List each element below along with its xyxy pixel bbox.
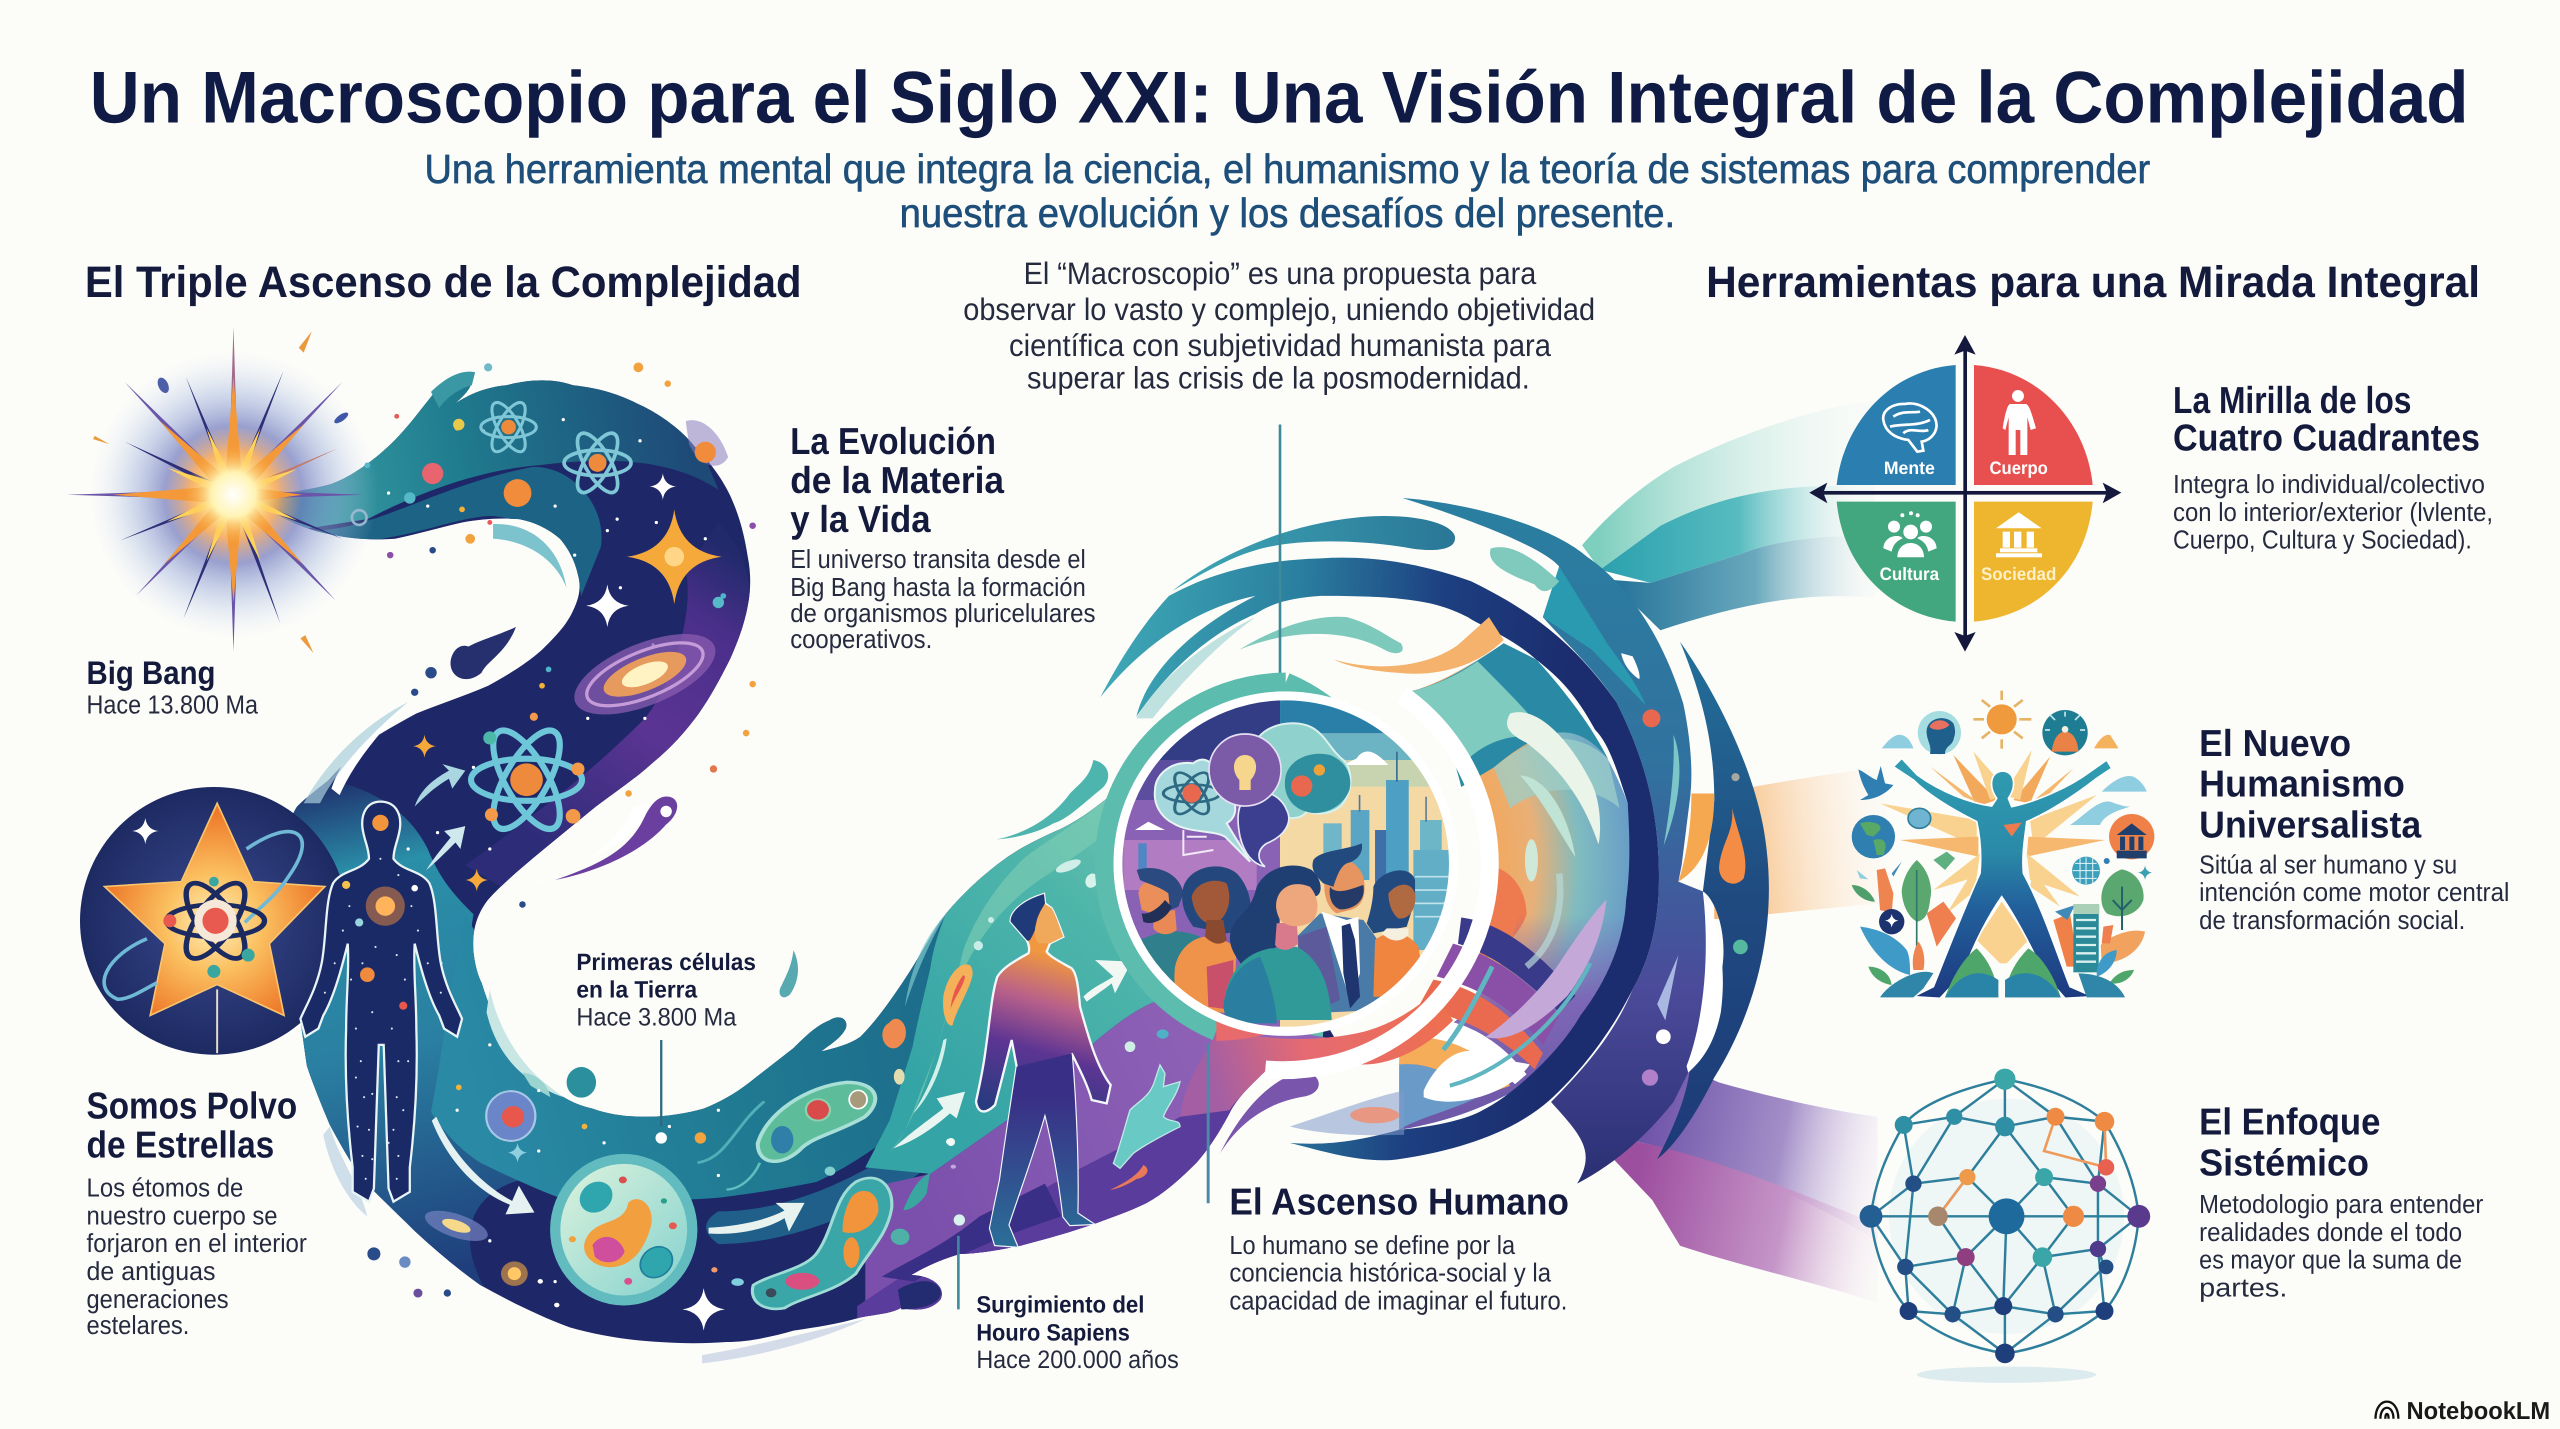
small cards [1857, 852, 2152, 880]
text: Big Bang [87, 656, 258, 720]
subtitle: Una herramienta mental que integra la ciencia, el humanismo y la teoría de sistemas para comprender [424, 147, 2150, 193]
red band under the circle [1205, 993, 1453, 1078]
left foliage [1852, 860, 1956, 997]
macroscope intro text: superar las crisis de la posmodernidad. [1027, 362, 1530, 397]
orange wedge [1678, 793, 1714, 882]
text: human ascent [1229, 1180, 1569, 1316]
red cell [943, 964, 973, 1026]
icon: star in a circle [80, 787, 348, 1055]
head in circle [1918, 711, 1961, 754]
emblem circle [2042, 710, 2088, 755]
text: systemic approach: Sistémico [2199, 1141, 2369, 1184]
text: new humanism: El Nuevo [2199, 722, 2351, 764]
ribbon wisps [304, 372, 865, 1363]
atom bubble [1155, 760, 1250, 862]
figure [1893, 758, 2112, 998]
text: systemic approach: realidades donde el todo [2199, 1220, 2462, 1247]
temple badge [2109, 814, 2154, 859]
icon: bubble planet [486, 1091, 535, 1141]
white crescent [1687, 891, 1723, 1073]
label: Cuerpo: Cuerpo [1990, 458, 2048, 478]
beam: purple to systemic [1562, 1045, 1878, 1303]
text: four quadrants [2173, 379, 2493, 555]
sun [1973, 691, 2031, 749]
subtitle: nuestra evolución y los desafíos del presente. [900, 191, 1675, 237]
mid ribbon objects and Homo sapiens [882, 760, 1319, 1247]
text: we are stardust: generaciones [87, 1287, 229, 1314]
quadrant diagram [1809, 335, 2121, 652]
macroscope circle scene [1113, 693, 1460, 1027]
bottom mounds [1945, 948, 2061, 997]
arrows on the upper ribbon [415, 764, 465, 870]
text: we are stardust: Los étomos de [87, 1176, 243, 1203]
text: evolution of matter and life: cooperativos. [790, 627, 932, 655]
axes with arrows [1809, 335, 2121, 652]
text: evolution of matter and life: El universo transita desde el [790, 547, 1086, 575]
swoosh above ribbon [997, 760, 1108, 839]
person: man in suit [1297, 843, 1380, 1013]
text: four quadrants: con lo interior/exterior (lvlente, [2173, 500, 2493, 527]
bird [1858, 766, 1893, 800]
icon: embryo organism [752, 1178, 892, 1309]
text: evolution of matter and life: de organismos pluricelulares [790, 601, 1096, 629]
small comet [1110, 1165, 1148, 1190]
text: evolution of matter and life: Big Bang hasta la formación [790, 575, 1086, 602]
teal streaks [905, 857, 1100, 1113]
callout line: Homo sapiens [957, 1236, 959, 1309]
icon: universal humanism figure [1852, 691, 2154, 998]
text: we are stardust: nuestro cuerpo se [87, 1203, 278, 1231]
bubble dots [1291, 764, 1325, 797]
heading: triple ascent: El Triple Ascenso de la Complejidad [85, 258, 802, 307]
text: four quadrants: Integra lo individual/colectivo [2173, 472, 2485, 500]
text: evolution of matter and life: de la Materia [790, 459, 1004, 501]
swoosh: teal upper stroke [1172, 516, 1455, 591]
text: Homo sapiens: Houro Sapiens [976, 1321, 1130, 1347]
arc: main navy [1100, 558, 1659, 1160]
text: first cells [576, 950, 756, 1032]
text: human ascent: capacidad de imaginar el futuro. [1229, 1288, 1567, 1316]
back bubble [1257, 723, 1351, 818]
small planet [1908, 808, 1931, 828]
white tear [1621, 653, 1640, 679]
title: Un Macroscopio para el Siglo XXI: Una Visión Integral de la Complejidad [90, 56, 2469, 139]
text: Homo sapiens [976, 1293, 1179, 1375]
arc: steel body [1402, 498, 1714, 1184]
pale teal blob [1490, 547, 1559, 591]
text: four quadrants: Cuatro Cuadrantes [2173, 416, 2480, 459]
purple blob below ribbon [1220, 1072, 1319, 1153]
person: bearded man left [1136, 868, 1200, 984]
quadrant: Mente [1837, 365, 1956, 485]
icon: brain [1883, 403, 1936, 452]
ring of the macroscope [1105, 682, 1490, 1070]
text: we are stardust: estelares. [87, 1313, 189, 1340]
icon: golden star and sparkles [413, 473, 725, 1331]
small dots on purple [891, 1029, 1169, 1245]
teal bubble [1285, 754, 1350, 813]
scene background [1113, 693, 1460, 1027]
callout line: human ascent [1207, 1043, 1209, 1203]
person: central woman [1223, 865, 1332, 1023]
pale band under left arc [1136, 617, 1256, 718]
beam: orange to humanism [1714, 767, 1886, 919]
text: systemic approach: partes. [2199, 1275, 2287, 1303]
text: first cells: Primeras células [576, 950, 756, 976]
text: systemic approach: El Enfoque [2199, 1100, 2380, 1143]
icon: institution building [1996, 512, 2042, 557]
label: Cultura: Cultura [1880, 564, 1939, 584]
teal streak [1664, 735, 1679, 846]
text: evolution of matter and life [790, 420, 1096, 655]
text: systemic approach [2199, 1100, 2484, 1303]
swirl panel right of the macroscope [1399, 643, 1636, 1130]
callout line: first cells [660, 1040, 662, 1127]
text: we are stardust: forjaron en el interior [87, 1231, 308, 1259]
icon: small galaxy [420, 1204, 492, 1247]
teal creature [1113, 1065, 1180, 1168]
arrow into cell [432, 1117, 534, 1214]
icon: large cell [550, 1154, 697, 1305]
text: human ascent: Lo humano se define por la [1229, 1233, 1515, 1260]
person: woman left [1174, 866, 1251, 1013]
macroscope intro text: científica con subjetividad humanista para [1009, 330, 1552, 364]
scene ring outline [1118, 696, 1453, 1031]
cosmic dots on the ribbon [367, 367, 753, 1293]
arrow right of man [1083, 960, 1132, 1002]
city skyline [1323, 752, 1455, 950]
pale disc [894, 1070, 904, 1085]
globe [2072, 857, 2100, 885]
text: evolution of matter and life: y la Vida [790, 498, 931, 540]
tail blob of the ribbon [898, 1281, 941, 1309]
icon: large atom [471, 713, 584, 838]
stripe on steel body [1543, 567, 1646, 705]
text: new humanism: Sitúa al ser humano y su [2199, 852, 2457, 880]
right foliage [2053, 869, 2145, 997]
man figure [976, 894, 1111, 1247]
text: we are stardust [87, 1084, 308, 1340]
earth [1852, 815, 1895, 858]
arrow left of man [893, 1092, 965, 1148]
text: Homo sapiens: Hace 200.000 años [976, 1347, 1179, 1375]
icon: bacterium [697, 1082, 875, 1189]
lower ribbon objects (cell stages) [420, 1019, 953, 1309]
icon: Big Bang explosion [67, 327, 377, 653]
icon: small planets in the upper ribbon [352, 419, 724, 608]
quadrant: Cuerpo [1974, 365, 2093, 485]
macroscope intro text: observar lo vasto y complejo, uniendo objetividad [963, 294, 1595, 328]
pale teal stroke [1239, 617, 1403, 653]
people group [1137, 843, 1420, 1023]
text: Big Bang: Hace 13.800 Ma [87, 692, 258, 720]
NotebookLM logo: NotebookLM [2407, 1398, 2550, 1425]
arrow out of cell [709, 1203, 805, 1234]
icon: person [2003, 390, 2036, 455]
small red disc [882, 1022, 904, 1048]
icon: people [1883, 511, 1937, 557]
text: systemic approach: es mayor que la suma de [2199, 1247, 2462, 1275]
icon: glowing orb [501, 1261, 528, 1286]
subtitle [424, 147, 2150, 237]
arc: outer dark [1657, 642, 1769, 1159]
quadrant: Cultura [1837, 502, 1956, 622]
macroscope intro text [963, 258, 1595, 397]
dark swirl bubble [1238, 792, 1289, 867]
text: systemic approach: Metodologio para entender [2199, 1192, 2484, 1220]
text: new humanism: Universalista [2199, 803, 2422, 846]
text: we are stardust: de Estrellas [87, 1123, 274, 1166]
text: we are stardust: de antiguas [87, 1259, 216, 1287]
clouds [1882, 735, 2147, 825]
text: four quadrants: Cuerpo, Cultura y Sociedad). [2173, 527, 2472, 555]
decorative dots near organisms [538, 1019, 953, 1307]
person: woman right [1367, 870, 1420, 997]
quadrant: Sociedad [1974, 502, 2093, 622]
text: first cells: en la Tierra [576, 978, 699, 1004]
text: Big Bang: Big Bang [87, 656, 216, 692]
bulb bubble [1209, 734, 1281, 806]
text: four quadrants: La Mirilla de los [2173, 379, 2411, 421]
beam: teal to quadrants [1582, 402, 1874, 630]
text: human ascent: conciencia histórica-social y la [1229, 1260, 1551, 1288]
icon: human figure of stardust [300, 802, 462, 1202]
left temple [1135, 822, 1213, 873]
callout line: macroscope [1279, 424, 1281, 694]
text: we are stardust: Somos Polvo [87, 1084, 297, 1127]
icon: small atoms [481, 398, 631, 498]
rays behind figure [1880, 750, 2105, 963]
orange crescent [1334, 617, 1504, 674]
text: Homo sapiens: Surgimiento del [976, 1293, 1144, 1319]
text: new humanism: de transformación social. [2199, 908, 2465, 936]
text: new humanism [2199, 722, 2509, 936]
text: new humanism: intención come motor central [2199, 880, 2509, 908]
arc dots and flame [1642, 709, 1748, 1086]
heart [2003, 823, 2022, 837]
upper swooshes around the macroscope [1100, 498, 1769, 1184]
icon: teal droplet [567, 1067, 596, 1098]
icon: spiral galaxy [564, 617, 726, 731]
blurred stain below circle [1290, 1091, 1404, 1135]
label: Mente: Mente [1884, 458, 1935, 478]
text: human ascent: El Ascenso Humano [1229, 1180, 1569, 1223]
text: new humanism: Humanismo [2199, 762, 2405, 805]
text: evolution of matter and life: La Evolución [790, 420, 996, 462]
ribbon: cosmic S-curve [245, 359, 1355, 1355]
text: first cells: Hace 3.800 Ma [576, 1004, 737, 1032]
label: Sociedad: Sociedad [1981, 564, 2056, 584]
icon: systemic network sphere [1860, 1069, 2150, 1383]
heading: tools: Herramientas para una Mirada Integral [1706, 258, 2480, 307]
macroscope intro text: El “Macroscopio” es una propuesta para [1024, 258, 1537, 292]
